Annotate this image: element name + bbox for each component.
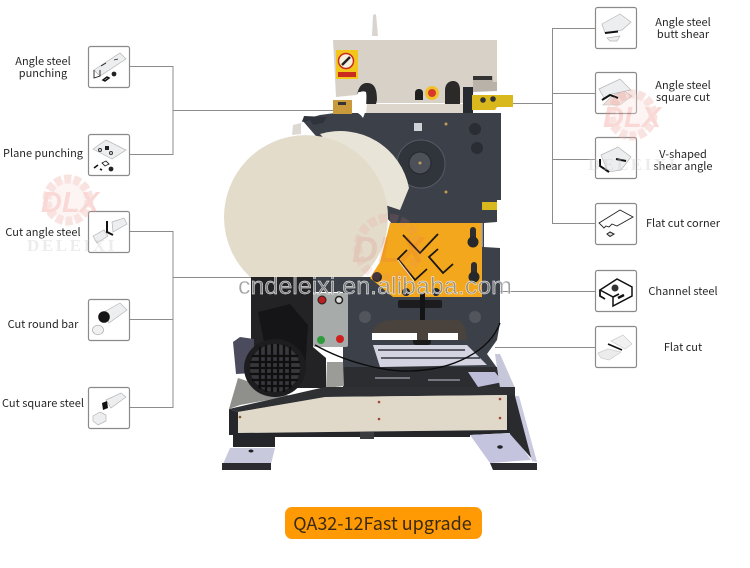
panel: angle steel square cut [596,72,711,114]
work table [373,345,487,367]
panel: v-shaped shear angle [596,138,712,178]
watermark: site address: cndeleixi.en.alibaba.com [238,273,512,300]
control box [313,293,348,347]
panel: angle steel square cut: Angle steel [655,77,711,93]
panel: cut round bar: Cut round bar [8,316,79,332]
panel: angle steel butt shear: butt shear [657,26,710,42]
throat opening [372,320,467,340]
top cover block [333,40,497,103]
flywheel [397,140,445,188]
watermark: centre logo: DLX [352,229,426,270]
cream base panel [238,395,507,433]
panel: flat cut corner: Flat cut corner [646,215,721,231]
panel: angle steel butt shear [596,8,711,48]
knobs [469,123,481,135]
watermark: centre logo [352,218,426,278]
machine: ironworker [222,14,537,470]
left connector lines [130,66,335,408]
yellow blade plate [370,223,482,297]
left arch [356,83,377,104]
lower top strip [366,104,464,113]
warning sign [336,50,358,79]
watermark: right logo: DLX [603,102,663,134]
cable [315,323,500,371]
right arch [445,81,460,104]
panel: cut round bar [8,300,130,340]
panel: cut angle steel: Cut angle steel [5,224,81,240]
watermark: left logo: DELEIXI [27,236,117,255]
right foot [470,395,537,470]
lower dark bed [343,367,515,388]
panel: flat cut: Flat cut [664,339,702,355]
left foot [222,448,275,470]
large disc [224,135,388,277]
yellow holders [333,95,513,210]
small white bracket [292,123,301,135]
lilac plates [468,372,503,387]
panel: cut angle steel [5,212,130,252]
motor [244,304,308,397]
right connector lines [495,28,595,348]
motor mount [233,337,254,374]
watermark: left logo [27,179,117,255]
panel: channel steel [596,270,718,312]
throat clamp and screw [398,293,442,345]
panel: flat cut corner [596,204,721,244]
panel: angle steel butt shear: Angle steel [655,14,711,30]
panel: angle steel punching: Angle steel [15,53,71,69]
panel: v-shaped shear angle: shear angle [654,158,712,174]
grey bracket [326,362,344,388]
panel: angle steel punching [15,46,130,88]
watermark: left logo: DLX [41,187,101,219]
main dark body [302,113,501,372]
panel: cut square steel [2,388,130,428]
round sticker [425,86,439,100]
right nameplate [473,76,497,92]
panel: cut square steel: Cut square steel [2,395,84,411]
panel: flat cut [596,326,702,368]
panel: channel steel: Channel steel [648,283,718,299]
watermark: right logo [588,94,678,174]
rear dark cabinet [251,277,326,388]
dark gap [463,87,473,113]
panel: angle steel square cut: square cut [656,89,710,105]
panel: v-shaped shear angle: V-shaped [659,146,707,162]
top pin [372,14,378,36]
watermark: right logo: DELEIXI [588,155,678,174]
base beam and wedge [229,387,515,412]
left platform [229,378,290,409]
panel: plane punching: Plane punching [3,145,84,161]
small arch [415,89,423,100]
panel: plane punching [3,134,130,176]
base underside [229,395,515,447]
back guard disc [320,131,409,210]
panel: angle steel punching: punching [19,65,68,81]
model badge: QA32-12Fast upgrade [293,510,472,536]
